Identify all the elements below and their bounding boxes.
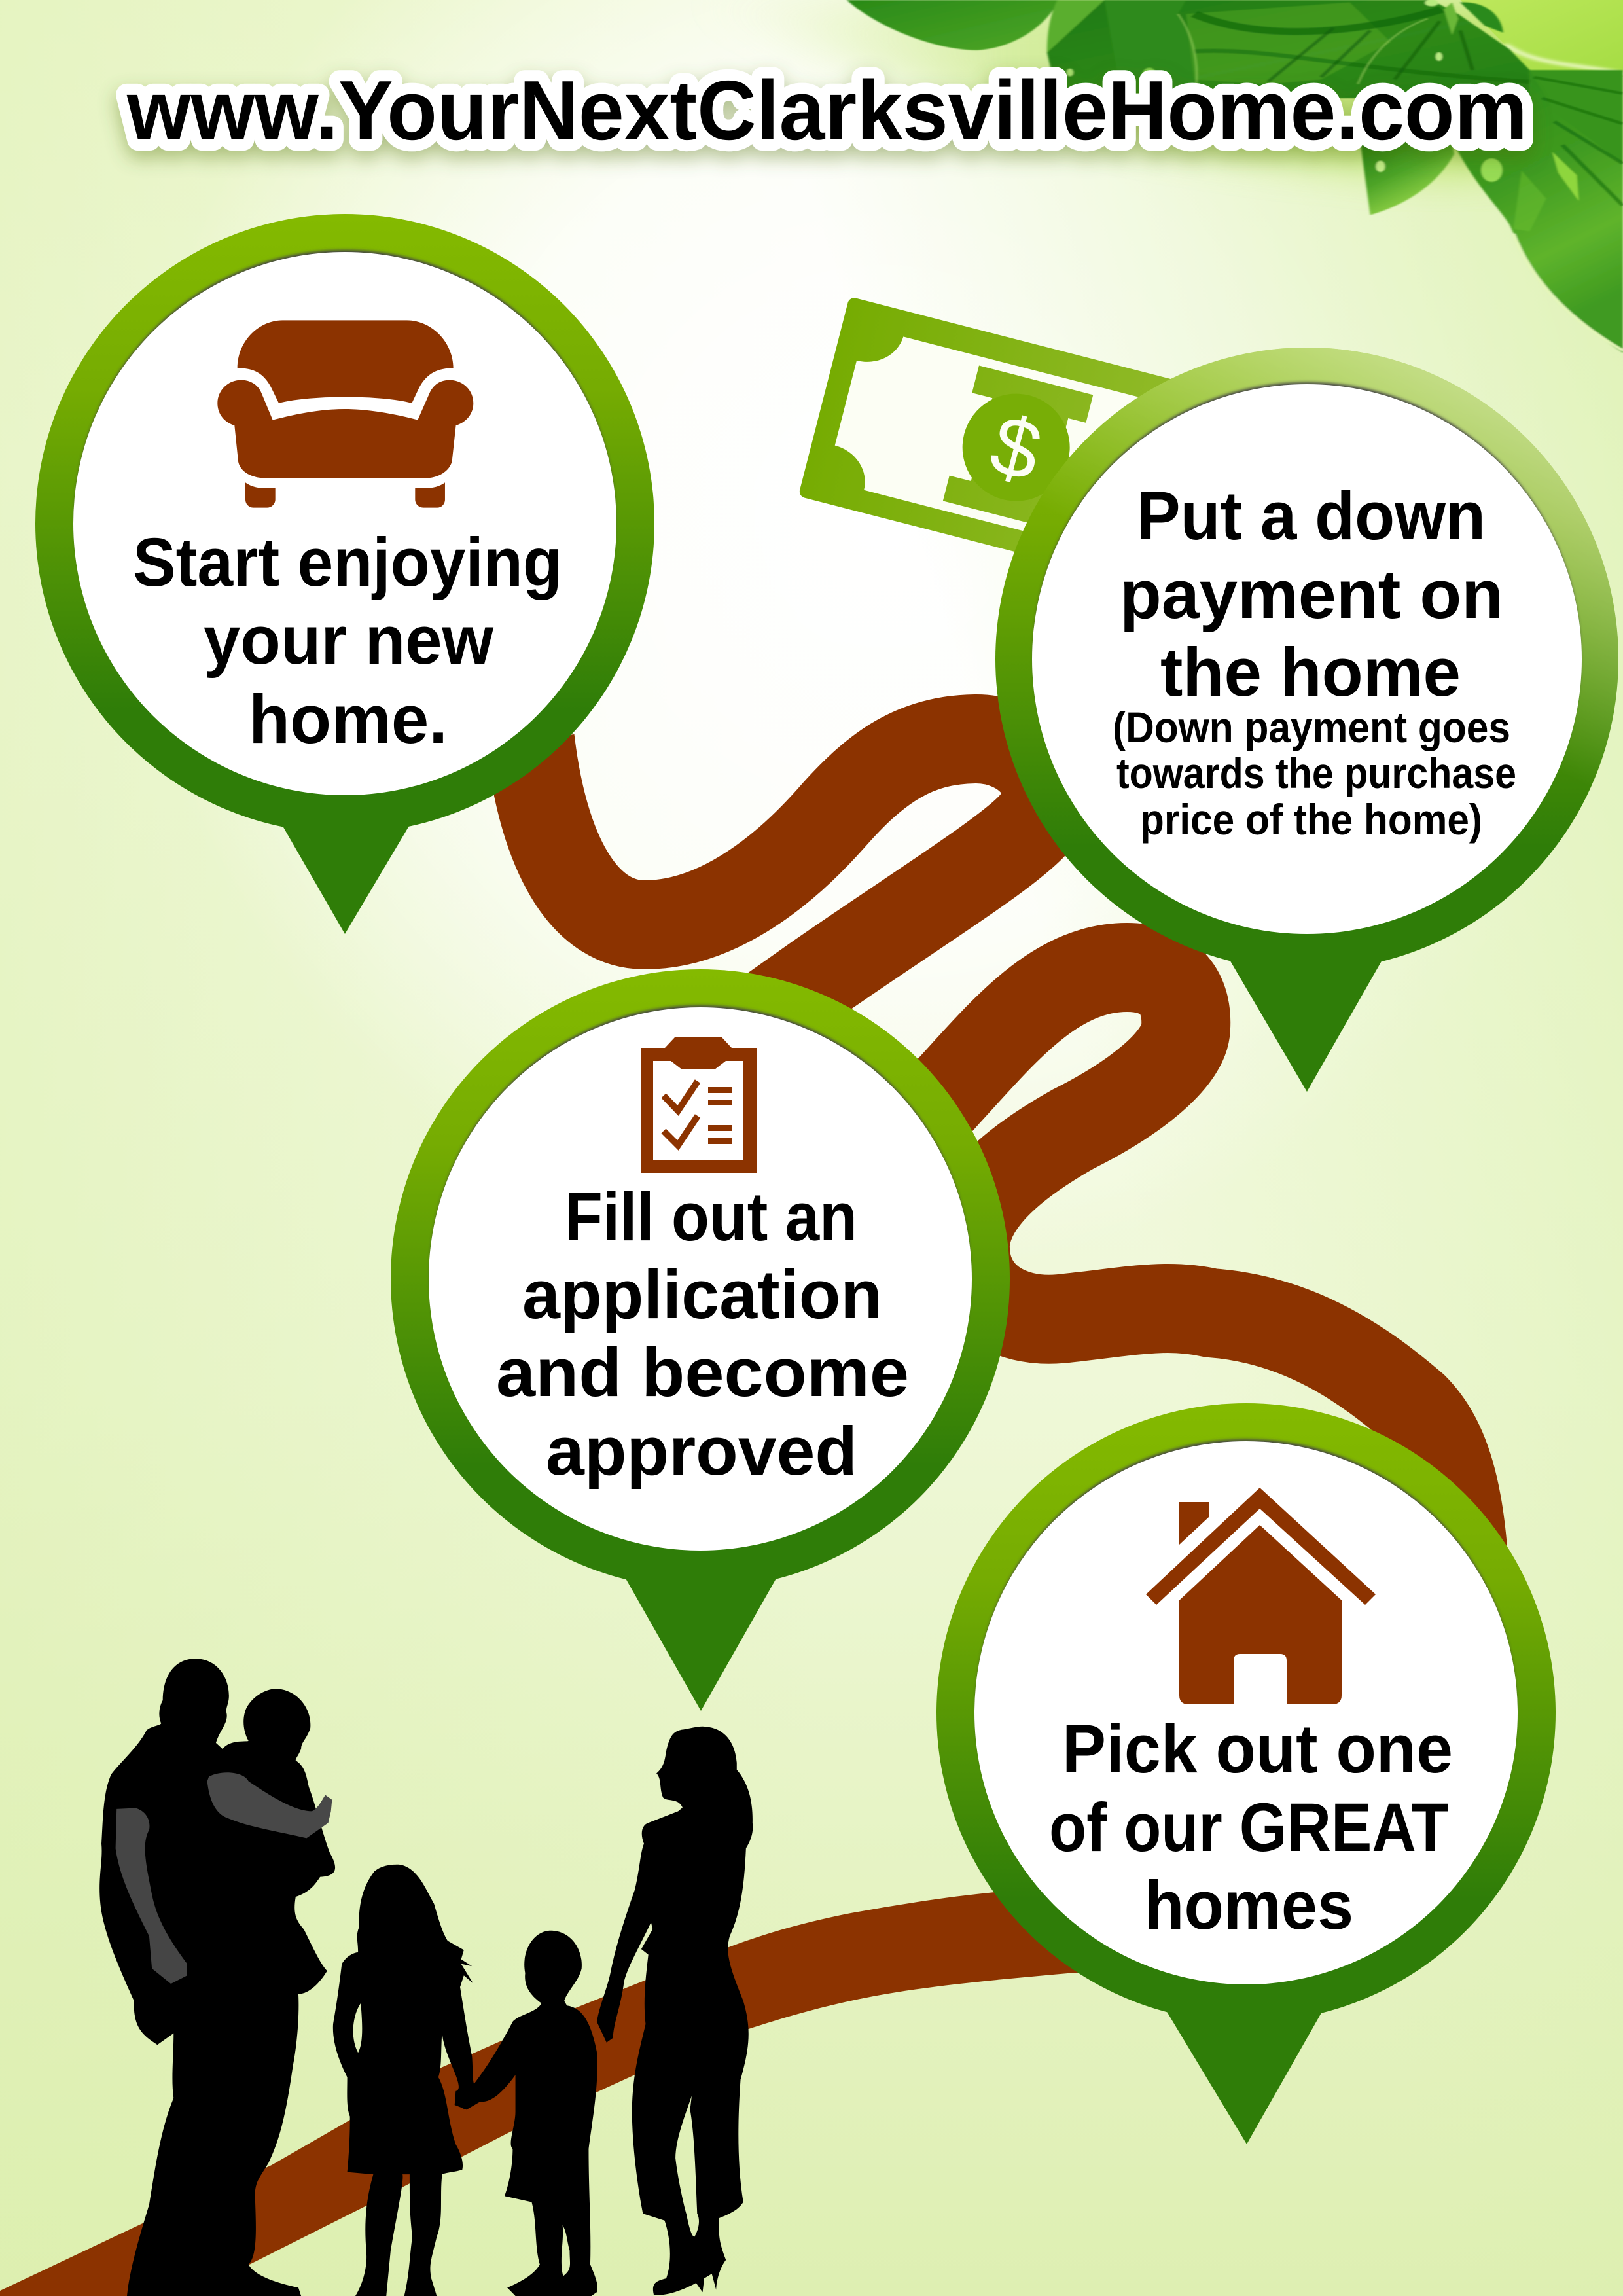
- icon: clipboard checklist: [641, 1037, 757, 1173]
- icon: dollar bill: $: [982, 397, 1050, 499]
- text: step label: home.: [249, 681, 448, 758]
- text: step label: homes: [1145, 1867, 1353, 1944]
- pin: pick out one of our great homes: [936, 1403, 1556, 2144]
- text: step label: [1113, 478, 1516, 844]
- text: step label: towards the purchase: [1116, 749, 1516, 797]
- text: step label: and become: [496, 1335, 909, 1411]
- icon: sofa: [217, 320, 473, 508]
- text: step label: [133, 524, 562, 758]
- family silhouette: [99, 1659, 753, 2296]
- text: step label: the home: [1160, 634, 1461, 711]
- text: step label: [1049, 1711, 1453, 1944]
- text: step label: Fill out an: [565, 1179, 857, 1255]
- brown road: lower section: [0, 1888, 1178, 2296]
- text: step label: Put a down: [1137, 478, 1486, 554]
- text: step label: your new: [204, 602, 493, 679]
- mother: [597, 1727, 753, 2295]
- text: step label: Start enjoying: [133, 524, 562, 601]
- pin: fill out an application: [391, 969, 1010, 1711]
- toddler's grey arm highlight: [207, 1772, 332, 1838]
- text: step label: [496, 1179, 909, 1490]
- text: step label: of our GREAT: [1049, 1789, 1449, 1866]
- text: step label: payment on: [1120, 556, 1503, 633]
- icon: house: [1146, 1488, 1376, 1704]
- pin: start enjoying your new home: [35, 214, 654, 934]
- boy: [455, 1931, 597, 2296]
- pin: put a down payment on the home: [995, 348, 1618, 1092]
- text: step label: approved: [546, 1413, 857, 1490]
- leaves in top right corner: [687, 0, 1623, 353]
- text: step label: Pick out one: [1062, 1711, 1453, 1787]
- icon: dollar bill: [798, 296, 1262, 602]
- title: website address: www.YourNextClarksvilleHome.com: [126, 63, 1527, 158]
- girl: [333, 1865, 474, 2296]
- father's grey arm highlight: [116, 1808, 187, 1984]
- father carrying toddler: [99, 1659, 335, 2296]
- text: step label: price of the home): [1140, 795, 1482, 844]
- brown road: upper winding section: [530, 739, 1466, 1636]
- text: step label: (Down payment goes: [1113, 703, 1510, 751]
- text: step label: application: [522, 1257, 882, 1333]
